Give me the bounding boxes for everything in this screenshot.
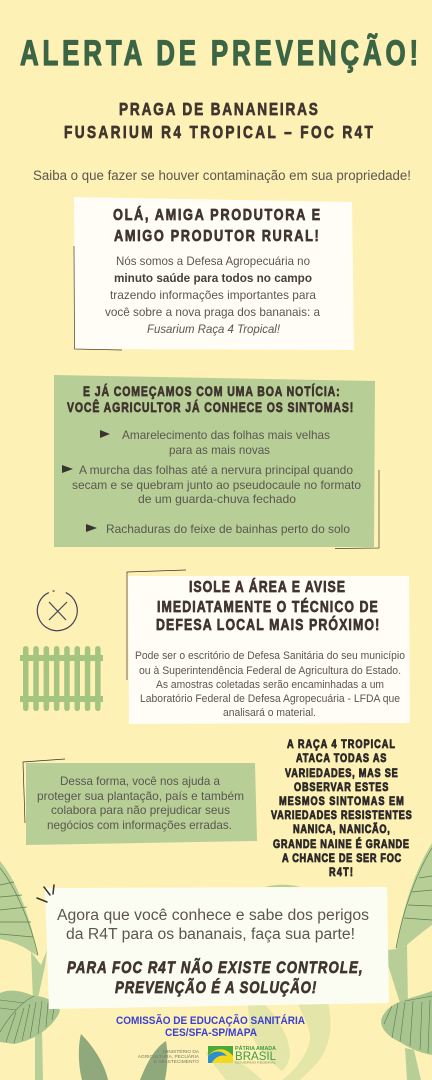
isolate body: Laboratório Federal de Defesa Agropecuária - LFDA que <box>140 693 400 705</box>
help text: colabora para não prejudicar seus <box>51 803 230 817</box>
greeting body: trazendo informações importantes para <box>110 288 316 302</box>
intro sentence: Saiba o que fazer se houver contaminação em sua propriedade! <box>33 168 411 183</box>
call to action text: Agora que você conhece e sabe dos perigos <box>57 907 369 924</box>
symptoms heading: VOCÊ AGRICULTOR JÁ CONHECE OS SINTOMAS! <box>67 399 353 415</box>
symptom 2: secam e se quebram junto ao pseudocaule no formato <box>72 478 361 492</box>
isolate body: As amostras coletadas serão encaminhadas a um <box>156 679 384 691</box>
isolate body: analisará o material. <box>223 707 316 719</box>
plants: pale bottom leaves <box>205 885 331 1080</box>
symptom 2: A murcha das folhas até a nervura principal quando <box>79 463 353 477</box>
panel: symptoms <box>54 375 379 548</box>
greeting body: Nós somos a Defesa Agropecuária no <box>116 254 310 268</box>
icon: fence <box>20 646 103 711</box>
subtitle <box>64 101 373 142</box>
credit: commission <box>116 1014 305 1039</box>
plant: right lower leaf <box>381 991 432 1055</box>
prevention statement <box>67 957 363 997</box>
symptom 1: Amarelecimento das folhas mais velhas <box>122 428 330 442</box>
help text: Dessa forma, você nos ajuda a <box>60 774 220 788</box>
logo: Pátria Amada Brasil <box>208 1045 276 1064</box>
callout: race 4 warning: VARIEDADES, MAS SE <box>285 768 398 780</box>
credit: commission: COMISSÃO DE EDUCAÇÃO SANITÁRIA <box>116 1014 305 1027</box>
title: ALERTA DE PREVENÇÃO! <box>20 33 418 73</box>
greeting body: minuto saúde para todos no campo <box>114 271 312 285</box>
symptom 2: de um guarda-chuva fechado <box>138 492 296 506</box>
call to action text <box>57 907 369 943</box>
logo: ministry: MINISTÉRIO DA <box>163 1048 200 1055</box>
logo: Pátria Amada Brasil: GOVERNO FEDERAL <box>235 1060 276 1064</box>
panel: isolate the area <box>127 570 410 724</box>
panel: call to action <box>37 885 389 1009</box>
callout: race 4 warning: ATACA TODAS AS <box>296 753 386 765</box>
subtitle: PRAGA DE BANANEIRAS <box>119 101 318 119</box>
callout: race 4 warning: OBSERVAR ESTES <box>294 782 388 794</box>
isolate heading: IMEDIATAMENTE O TÉCNICO DE <box>157 598 378 615</box>
prevention statement: PARA FOC R4T NÃO EXISTE CONTROLE, <box>67 957 363 977</box>
icon: circled X <box>31 584 84 637</box>
plant: left large leaf <box>0 861 47 1080</box>
logo: ministry: E ABASTECIMENTO <box>154 1059 199 1065</box>
plants: dark bottom leaves <box>79 1034 167 1080</box>
greeting body: Fusarium Raça 4 Tropical! <box>147 322 281 336</box>
icon: spark lines <box>37 885 54 902</box>
logo: Pátria Amada Brasil: PÁTRIA AMADA <box>235 1045 276 1052</box>
callout: race 4 warning: NANICA, NANICÃO, <box>293 822 390 836</box>
prevention statement: PREVENÇÃO É A SOLUÇÃO! <box>115 977 316 997</box>
panel: greeting <box>74 197 354 350</box>
callout: race 4 warning <box>271 739 412 879</box>
isolate heading: ISOLE A ÁREA E AVISE <box>189 578 345 595</box>
help text: proteger sua plantação, país e também <box>37 789 244 803</box>
help text: negócios com informações erradas. <box>47 818 232 832</box>
symptom 1: para as mais novas <box>169 443 270 457</box>
callout: race 4 warning: A RAÇA 4 TROPICAL <box>287 739 396 751</box>
callout: race 4 warning: VARIEDADES RESISTENTES <box>271 810 412 822</box>
isolate heading: DEFESA LOCAL MAIS PRÓXIMO! <box>156 615 379 633</box>
isolate heading <box>156 578 379 633</box>
callout: race 4 warning: A CHANCE DE SER FOC <box>282 853 402 865</box>
logo: ministry: AGRICULTURA, PECUÁRIA <box>138 1053 200 1060</box>
greeting heading: AMIGO PRODUTOR RURAL! <box>114 228 319 245</box>
help text <box>37 774 244 832</box>
callout: race 4 warning: R4T! <box>329 867 353 879</box>
greeting heading: OLÁ, AMIGA PRODUTORA E <box>113 206 321 224</box>
symptom 2 <box>62 463 361 506</box>
symptoms heading <box>67 383 353 415</box>
callout: race 4 warning: GRANDE NAINE É GRANDE <box>273 837 409 851</box>
subtitle: FUSARIUM R4 TROPICAL – FOC R4T <box>64 124 373 142</box>
isolate body <box>135 650 405 719</box>
greeting heading <box>113 206 321 245</box>
isolate body: ou à Superintendência Federal de Agricultura do Estado. <box>139 665 401 677</box>
symptoms heading: E JÁ COMEÇAMOS COM UMA BOA NOTÍCIA: <box>83 383 340 399</box>
call to action text: da R4T para os bananais, faça sua parte! <box>66 926 355 943</box>
logo: ministry <box>138 1048 200 1065</box>
callout: race 4 warning: MESMOS SINTOMAS EM <box>279 796 404 808</box>
isolate body: Pode ser o escritório de Defesa Sanitária do seu município <box>135 650 405 662</box>
plant: left lower leaf <box>0 991 60 1044</box>
credit: commission: CES/SFA-SP/MAPA <box>165 1027 257 1039</box>
symptom 1 <box>100 428 330 457</box>
plant: right large leaf <box>388 843 432 1080</box>
symptom 3: Rachaduras do feixe de bainhas perto do solo <box>106 522 350 536</box>
logo: Pátria Amada Brasil: BRASIL <box>235 1049 276 1063</box>
greeting body: você sobre a nova praga dos bananais: a <box>105 305 320 319</box>
panel: your help <box>23 759 257 845</box>
greeting body <box>105 254 320 336</box>
